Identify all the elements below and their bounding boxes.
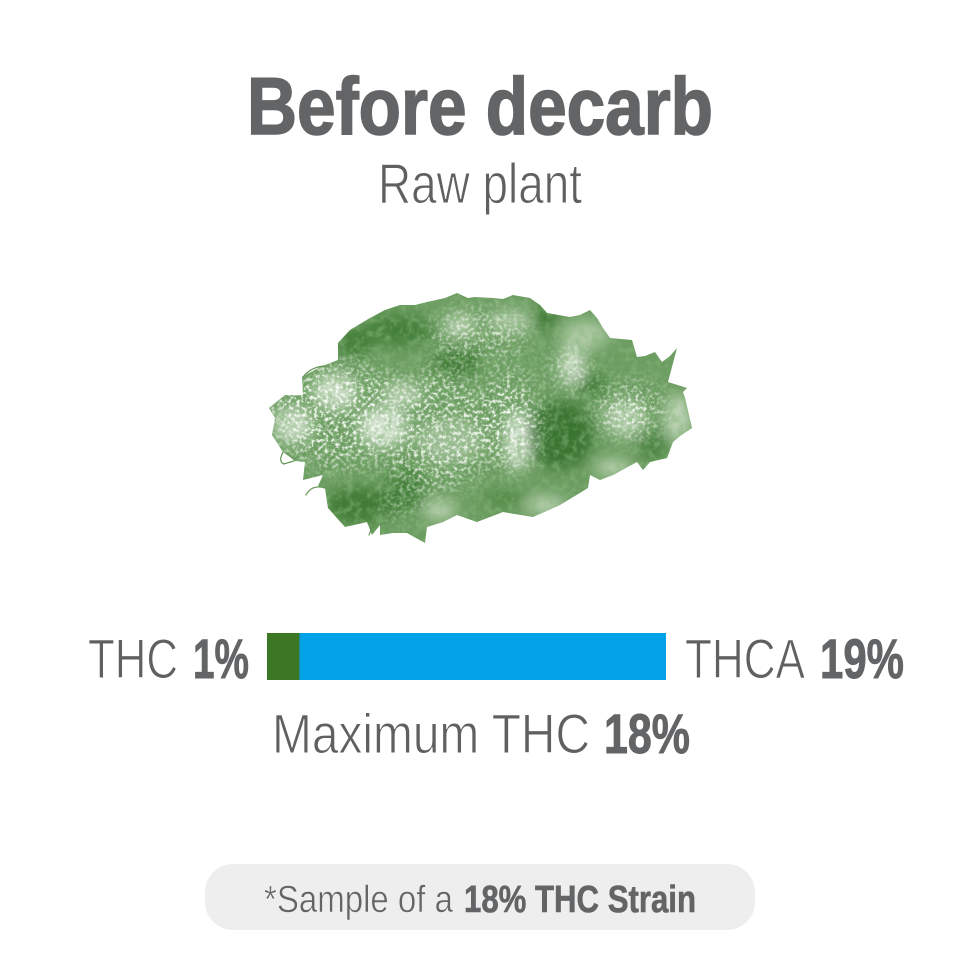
label: THCA 19%: THCA xyxy=(685,627,806,690)
footnote pill: 18% THC Strain xyxy=(464,879,696,921)
stacked bar: THC and THCA share xyxy=(267,633,666,680)
subtitle: Raw plant xyxy=(378,152,582,216)
label: Maximum THC 18%: 18% xyxy=(604,702,690,765)
label: THC 1%: THC xyxy=(88,627,178,690)
footnote pill: *Sample of a xyxy=(264,879,454,921)
label: Maximum THC 18%: Maximum THC xyxy=(272,702,590,765)
label: THC 1%: 1% xyxy=(193,627,249,690)
footnote pill xyxy=(205,864,755,930)
title: Before decarb xyxy=(247,62,713,152)
decorative hair strands xyxy=(281,366,371,535)
label: THCA 19% xyxy=(685,627,904,690)
image: green-tinted raw cannabis bud xyxy=(260,285,700,550)
label: THCA 19%: 19% xyxy=(820,627,904,690)
